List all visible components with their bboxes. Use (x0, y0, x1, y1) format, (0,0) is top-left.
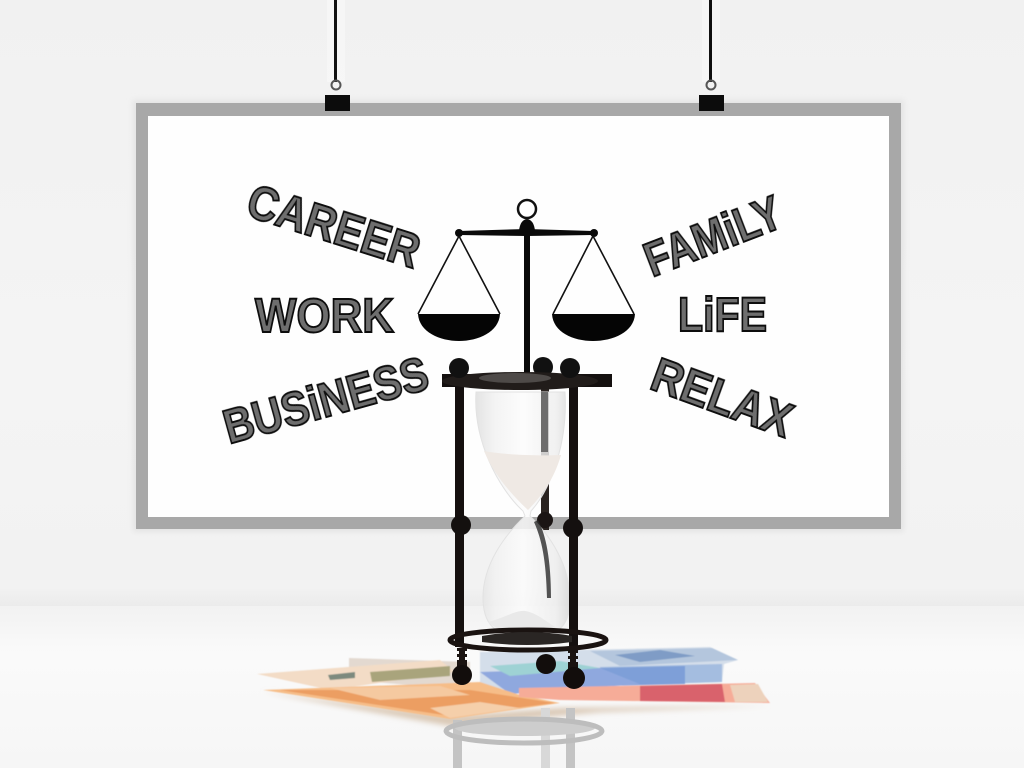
framed board (133, 100, 904, 532)
word: career: CAREER (241, 175, 426, 279)
banknote shadow (262, 692, 770, 726)
base ring (450, 630, 606, 650)
background wall (0, 0, 1024, 606)
back rod (541, 380, 549, 530)
word: work: WORK (255, 290, 394, 343)
top finials (449, 358, 469, 378)
word: family: FAMiLY (637, 187, 789, 287)
sand top (484, 451, 561, 510)
feet (457, 648, 467, 668)
sand bottom (488, 611, 566, 636)
balance scale icon (418, 200, 635, 374)
front left rod (455, 385, 464, 647)
left hanging clip (325, 0, 350, 111)
top plate (442, 374, 612, 387)
word: life: LiFE (678, 289, 767, 342)
right hanging clip (699, 0, 724, 111)
mid beads (451, 515, 471, 535)
hourglass (442, 357, 612, 689)
front right rod (569, 385, 578, 647)
banknotes (257, 647, 770, 719)
hourglass reflection (446, 708, 602, 768)
word: relax: RELAX (644, 349, 800, 448)
word: business: BUSiNESS (218, 347, 434, 455)
floor (0, 606, 1024, 768)
glass bulbs (476, 392, 570, 636)
